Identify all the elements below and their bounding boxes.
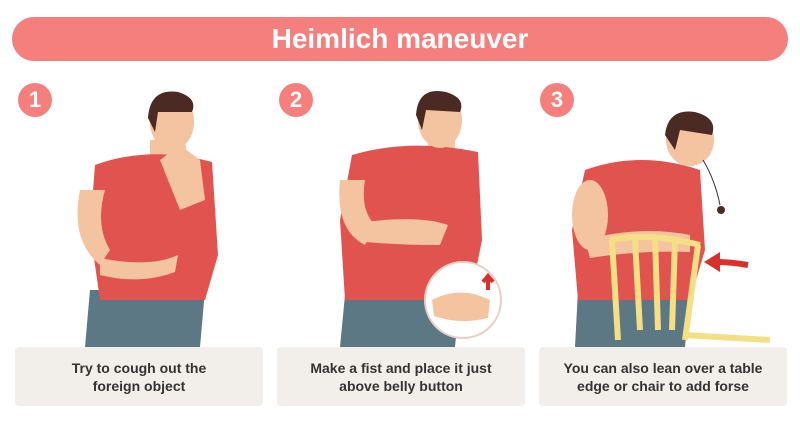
caption 1 [15, 347, 263, 406]
step number 1 [18, 83, 52, 117]
figure 2: fist above belly button [339, 91, 501, 347]
caption 1: foreign object [93, 378, 185, 394]
caption 3: edge or chair to add forse [577, 378, 749, 394]
title banner: Heimlich maneuver [272, 23, 528, 54]
caption 2: Make a fist and place it just [310, 360, 492, 376]
step number 2 [279, 83, 313, 117]
step number 1: 1 [29, 87, 41, 112]
step number 2: 2 [290, 87, 302, 112]
arrow [704, 252, 748, 272]
step number 3 [540, 83, 574, 117]
caption 3 [539, 347, 787, 406]
caption 2: above belly button [339, 378, 463, 394]
step number 3: 3 [551, 87, 563, 112]
inset: hand close-up [425, 262, 501, 338]
title banner [12, 17, 788, 61]
figure 1: choking man [78, 92, 218, 347]
figure 3: leaning over chair [572, 111, 770, 347]
caption 3: You can also lean over a table [564, 360, 762, 376]
chair [610, 237, 770, 340]
caption 1: Try to cough out the [72, 360, 206, 376]
caption 2 [277, 347, 525, 406]
